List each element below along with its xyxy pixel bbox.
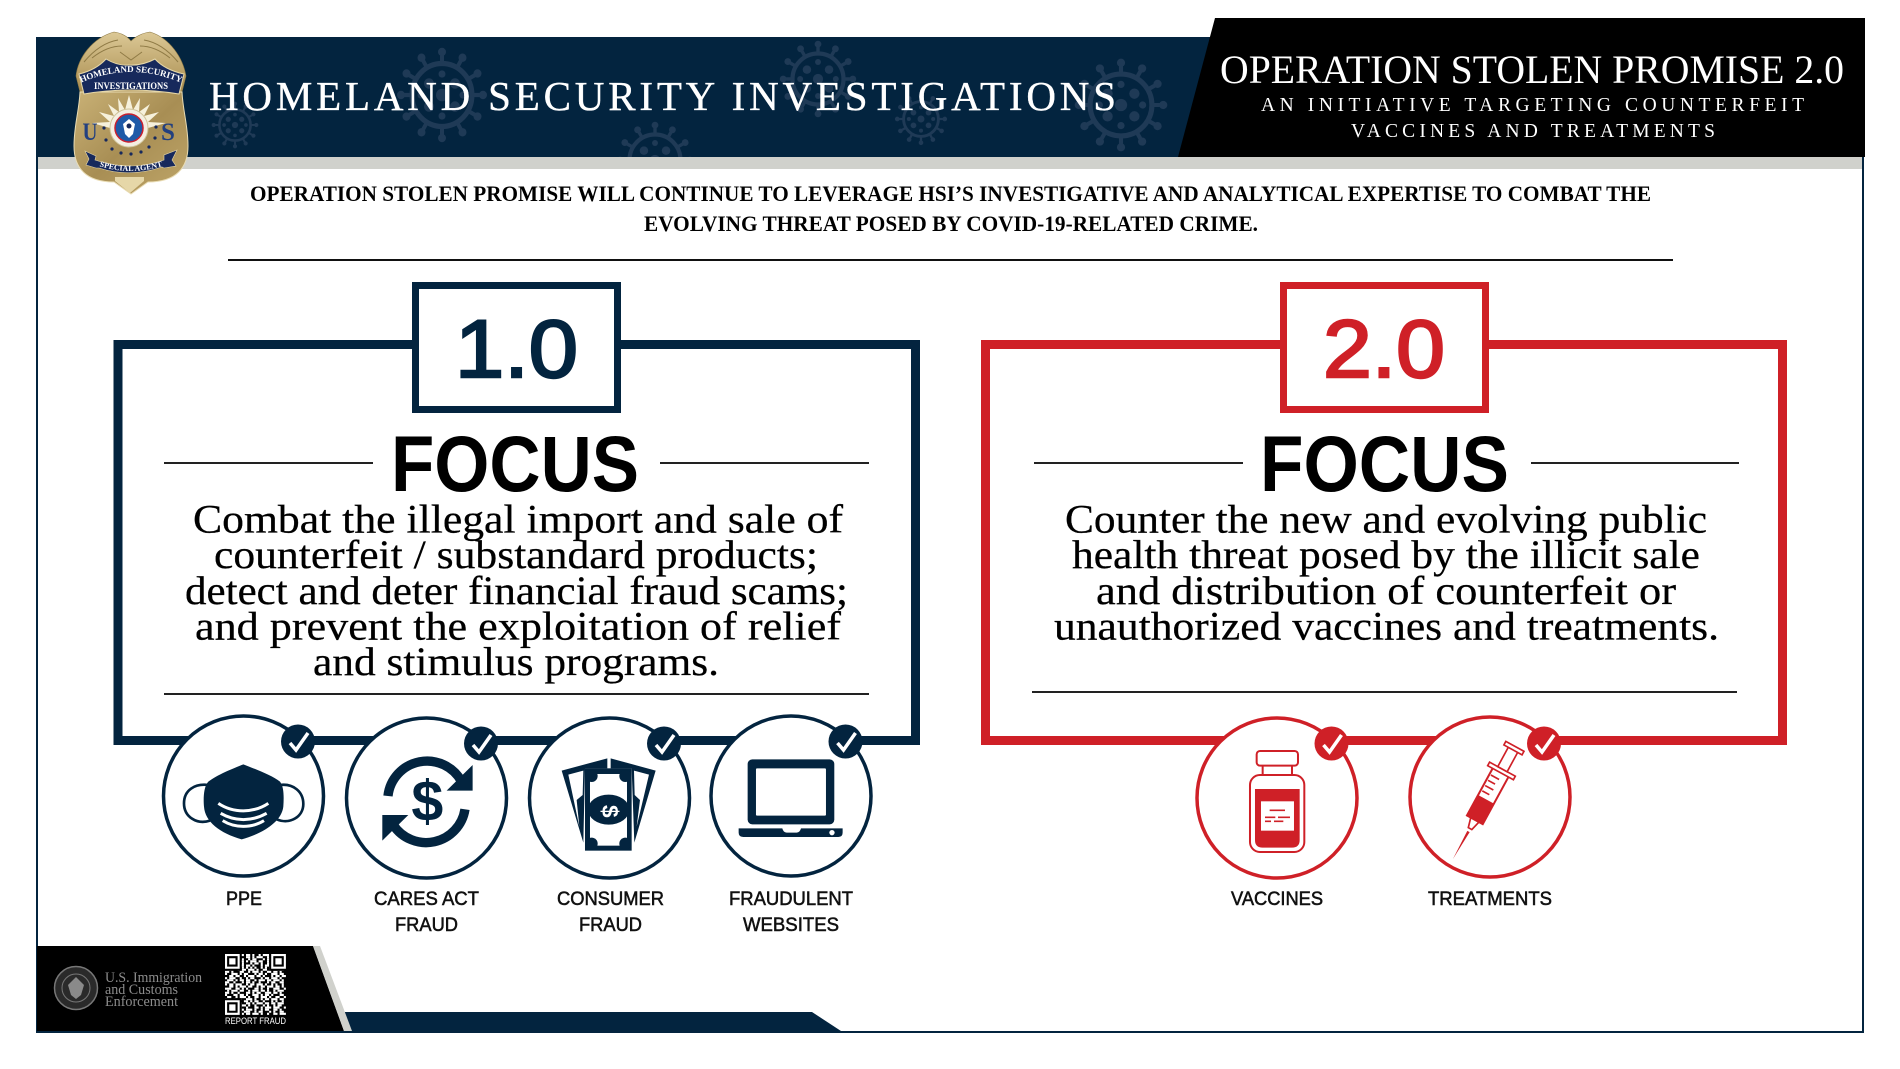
money cycle glyph: $ <box>411 770 443 834</box>
focus description: detect and deter financial fraud scams; <box>185 568 848 613</box>
header band <box>38 39 1210 157</box>
check badge <box>1527 726 1561 760</box>
version box 1.0 <box>416 286 618 410</box>
syringe glyph <box>1440 739 1528 866</box>
operation title: OPERATION STOLEN PROMISE 2.0 <box>1220 47 1844 92</box>
grey strip under header <box>38 157 1862 169</box>
banner text <box>79 66 183 92</box>
ribbon text: SPECIAL AGENT <box>100 161 162 171</box>
ICE wordmark: Enforcement <box>105 994 179 1010</box>
focus description: and prevent the exploitation of relief <box>195 604 842 648</box>
version box 2.0: 2.0 <box>1323 304 1445 395</box>
panel: 2.0 focus <box>986 286 1782 740</box>
label: CARES Act fraud: FRAUD <box>395 914 458 936</box>
focus heading: FOCUS <box>391 419 639 508</box>
focus description <box>185 496 848 684</box>
focus description: unauthorized vaccines and treatments. <box>1054 604 1719 648</box>
label: fraudulent websites: WEBSITES <box>743 914 839 936</box>
focus description: and distribution of counterfeit or <box>1096 568 1676 613</box>
virus watermarks <box>212 40 1168 157</box>
icon: fraudulent websites <box>711 716 871 876</box>
ribbon <box>85 150 177 173</box>
banner text: HOMELAND SECURITY <box>79 66 183 83</box>
banknotes glyph: $ <box>597 805 623 818</box>
label: CARES Act fraud <box>374 888 479 936</box>
top banner <box>79 59 184 94</box>
U S letters <box>82 119 175 146</box>
version box 1.0: 1.0 <box>455 304 578 395</box>
focus description: health threat posed by the illicit sale <box>1072 532 1700 577</box>
black title panel <box>1178 18 1865 157</box>
subtitle: AN INITIATIVE TARGETING COUNTERFEIT <box>1261 95 1804 116</box>
version box 2.0 <box>1284 286 1486 410</box>
icon: special agent badge <box>74 32 188 194</box>
focus description: Combat the illegal import and sale of <box>193 496 844 542</box>
check badge <box>1314 726 1348 760</box>
money cycle glyph <box>382 761 473 843</box>
check badge <box>828 724 862 758</box>
banknotes glyph <box>562 758 656 851</box>
label: vaccines: VACCINES <box>1231 888 1323 910</box>
intro text: EVOLVING THREAT POSED BY COVID-19-RELATED CRIME. <box>644 211 1258 236</box>
focus description: and stimulus programs. <box>313 639 719 684</box>
shield tip <box>115 177 144 193</box>
ICE wordmark: and Customs <box>105 982 178 998</box>
subtitle <box>1261 95 1804 142</box>
ICE wordmark <box>105 970 202 1010</box>
vial glyph <box>1250 751 1304 852</box>
laptop glyph <box>739 759 843 837</box>
intro text: OPERATION STOLEN PROMISE WILL CONTINUE TO LEVERAGE HSI’S INVESTIGATIVE AND ANALYTICAL EXPERTISE TO COMBAT THE <box>250 181 1651 206</box>
panel: 1.0 focus <box>118 286 916 740</box>
focus description: counterfeit / substandard products; <box>214 532 818 577</box>
focus heading: FOCUS <box>1260 419 1509 508</box>
intro text <box>250 181 1651 236</box>
label: consumer fraud: FRAUD <box>579 914 642 936</box>
label: PPE: PPE <box>226 888 262 910</box>
stars <box>102 125 158 156</box>
subtitle: VACCINES AND TREATMENTS <box>1351 121 1715 142</box>
label: CARES Act fraud: CARES ACT <box>374 888 479 910</box>
banner text: INVESTIGATIONS <box>94 82 168 92</box>
QR code <box>225 954 286 1015</box>
label: treatments: TREATMENTS <box>1428 888 1552 910</box>
DHS seal <box>110 109 148 147</box>
icon: PPE mask <box>164 716 324 876</box>
label: fraudulent websites <box>729 888 853 936</box>
U S letters: U <box>82 119 98 146</box>
ICE wordmark: U.S. Immigration <box>105 970 202 986</box>
label: consumer fraud: CONSUMER <box>557 888 664 910</box>
U S letters: S <box>161 119 175 146</box>
icon: consumer fraud <box>530 718 690 878</box>
icon: CARES act fraud <box>346 718 506 878</box>
shield body <box>74 92 188 194</box>
icon: vaccines <box>1197 718 1357 878</box>
report fraud caption: REPORT FRAUD <box>225 1016 286 1027</box>
panel outline <box>986 344 1782 740</box>
icon: treatments <box>1410 717 1570 877</box>
eagle wings <box>76 32 186 92</box>
divider rule <box>228 259 1673 261</box>
focus description: Counter the new and evolving public <box>1065 496 1707 542</box>
check badge <box>281 724 315 758</box>
footer panel <box>37 946 352 1031</box>
focus description <box>1054 496 1719 648</box>
header title: HOMELAND SECURITY INVESTIGATIONS <box>209 73 1116 119</box>
icon: DHS seal <box>54 966 98 1010</box>
navy footer band <box>345 1012 841 1031</box>
mask glyph <box>184 764 303 839</box>
label: consumer fraud <box>557 888 664 936</box>
label: fraudulent websites: FRAUDULENT <box>729 888 853 910</box>
panel outline <box>118 344 916 740</box>
check badge <box>647 726 681 760</box>
sun rays <box>92 95 166 128</box>
check badge <box>464 726 498 760</box>
